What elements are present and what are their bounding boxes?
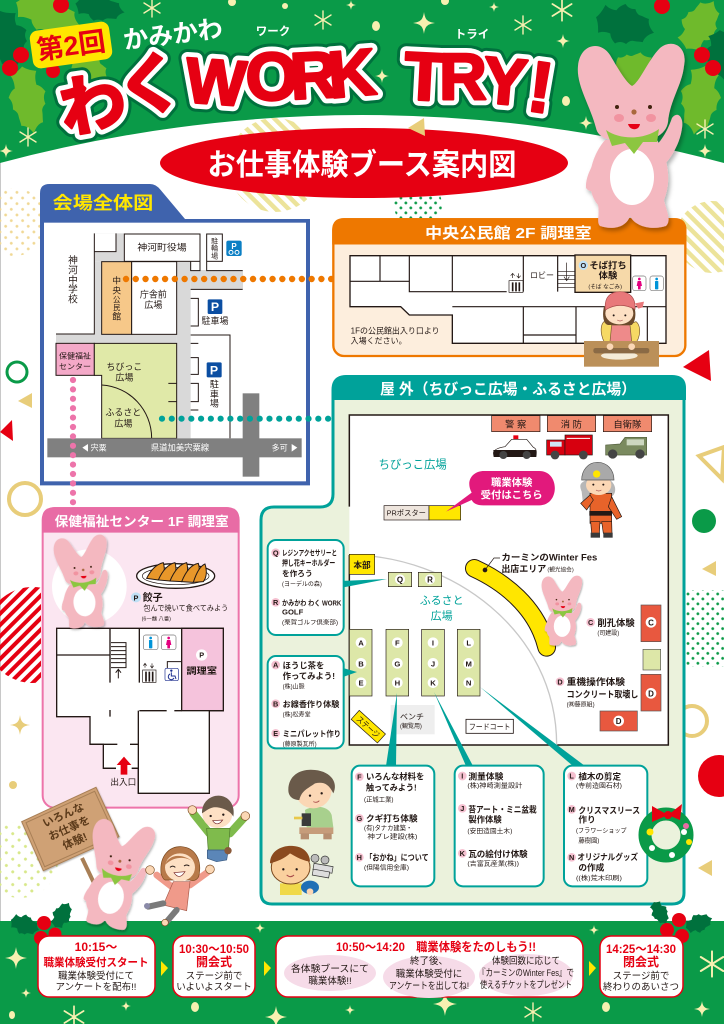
box: F G H: 触ってみよう! — [366, 781, 417, 792]
label: D heavy machinery: 重機操作体験 — [567, 676, 626, 687]
building labels: ちびっこ — [106, 362, 142, 372]
building labels: 広場 — [144, 299, 162, 310]
box: I J K: (吉富瓦産業(株)) — [467, 859, 519, 868]
agency signs — [492, 416, 652, 432]
box: I J K: I — [461, 772, 463, 781]
icon: parking 2 — [207, 362, 222, 377]
main title: waku WORK TRY: T — [402, 38, 448, 116]
building labels: 館 — [112, 310, 121, 321]
box: Q and R — [268, 540, 344, 635]
timeline: opening ceremony — [173, 936, 255, 997]
building labels: ふるさと — [105, 408, 141, 418]
dotted connector: teal — [162, 416, 333, 422]
timeline: reception start: 10:15〜 — [75, 940, 117, 954]
panel: venue overview map — [40, 184, 310, 485]
holly leaves: right — [591, 0, 724, 138]
booths C D: D — [616, 717, 622, 726]
icon: bicycle parking: P — [231, 242, 237, 251]
callout: reception here: 受付はこちら — [481, 489, 543, 502]
booths A to N: J — [431, 659, 435, 668]
illustration: woman rolling soba — [584, 292, 659, 367]
icon: accessible restroom — [165, 662, 182, 681]
side boxes: Q R and A B E — [268, 540, 344, 748]
signboard stick — [82, 858, 103, 902]
booths Q R — [388, 572, 442, 587]
area label: furusato plaza: ふるさと — [420, 594, 464, 607]
box: Q and R: かみかわ わく WORK — [282, 598, 342, 607]
icon: entrance arrow — [117, 757, 131, 775]
box: L M N: ((株)荒木印刷) — [576, 873, 622, 882]
icon: elevator — [509, 273, 523, 292]
map frame and tab — [40, 184, 310, 485]
box: L M N: (フラワーショップ — [576, 827, 627, 835]
furigana: waaku: ワーク — [256, 25, 290, 38]
main title: waku WORK TRY: わ — [54, 63, 132, 147]
timeline: reception start — [38, 936, 155, 997]
decorative shapes — [0, 118, 724, 898]
tan triangle — [408, 118, 425, 136]
dotted connector: orange — [126, 276, 333, 282]
floor plan: P — [199, 651, 204, 660]
box: I J K: J — [460, 804, 464, 813]
floor plan: 調理室 — [186, 665, 217, 676]
icon: parking 1: P — [211, 300, 219, 314]
mascot rabbit: header — [578, 44, 685, 228]
signboard: 体験! — [60, 829, 89, 853]
booth: soba making: 体験 — [599, 270, 618, 281]
box: F G H: F — [357, 772, 362, 781]
box: L M N: M — [569, 805, 575, 814]
booth P label: 包んで焼いて食べてみよう — [143, 603, 228, 612]
box: F G H: (正城工業) — [364, 794, 394, 803]
road network — [56, 233, 243, 438]
footer band — [0, 921, 724, 1024]
box: L M N: オリジナルグッズ — [577, 851, 638, 862]
oval: at each booth — [284, 955, 376, 991]
main title: waku WORK TRY: W — [183, 44, 249, 120]
holly leaves: left — [0, 0, 127, 137]
building labels: 輪 — [211, 244, 218, 253]
area label: chibikko plaza: ちびっこ広場 — [378, 457, 447, 471]
dotted connector: pink — [70, 380, 76, 510]
agency signs: 警 察 — [505, 418, 526, 429]
entry note — [351, 325, 440, 346]
booths A to N: H — [395, 679, 401, 688]
icon: restrooms — [143, 635, 176, 650]
icon: parking 1 — [208, 299, 222, 314]
illustration: jumping boy — [188, 796, 250, 862]
building labels: 公 — [113, 295, 121, 304]
prefectural road: 宍粟 — [91, 444, 107, 453]
winter fes area: 出店エリア — [501, 563, 546, 574]
outdoor site map — [349, 415, 668, 745]
timeline: opening ceremony: いよいよスタート — [176, 982, 252, 993]
main title: waku WORK TRY: O — [246, 39, 298, 115]
illustration: boy with hammer — [288, 770, 335, 839]
prefectural road: 県道加美宍粟線 — [151, 443, 210, 453]
main title: waku WORK TRY: ! — [523, 47, 558, 129]
panel heading: 中央公民館 2F 調理室 — [425, 225, 592, 242]
icon: bicycle parking — [226, 241, 242, 256]
timeline: closing ceremony: ステージ前で — [613, 970, 669, 982]
booths A to N: F — [395, 639, 400, 648]
building labels: 中 — [112, 274, 121, 285]
box: I J K — [455, 766, 544, 886]
box: F G H: いろんな材料を — [366, 771, 424, 782]
illustration: jumping girl — [144, 847, 214, 926]
timeline: opening ceremony: ステージ前で — [186, 970, 242, 982]
box: A B E: ミニパレット作り — [283, 729, 341, 739]
main title: waku WORK TRY — [54, 34, 558, 147]
entry note: 1Fの公民館出入り口より — [351, 325, 440, 335]
box: Q and R: レジンアクセサリーと — [282, 548, 337, 558]
box: Q and R: Q — [273, 548, 279, 557]
floor plan — [350, 256, 666, 343]
booths C D — [600, 605, 661, 731]
box: A B E: E — [273, 729, 278, 738]
bottom boxes: F to N — [270, 766, 647, 895]
illustration: christmas wreath — [645, 804, 692, 858]
callout pointers — [340, 579, 585, 766]
signboard: いろんな — [41, 800, 86, 830]
timeline: opening ceremony: 10:30〜10:50 — [179, 942, 249, 956]
box: Q and R: GOLF — [282, 608, 304, 617]
box: F G H — [352, 766, 434, 886]
box: F G H: (有)タナカ建築・ — [364, 823, 412, 832]
box: L M N: N — [569, 853, 574, 862]
box: F G H: 神プレ建設(株) — [367, 832, 417, 841]
label: D heavy machinery — [556, 676, 638, 709]
building labels: 駐 — [210, 378, 219, 389]
timeline: closing ceremony: 終わりのあいさつ — [603, 981, 679, 993]
building labels: 駐車場 — [202, 315, 228, 326]
building labels: 学 — [68, 284, 78, 296]
PR poster stand: PRポスター — [387, 509, 426, 518]
booth: soba making: (そば なごみ) — [588, 283, 622, 291]
oval: ticket gift — [478, 954, 574, 996]
timeline: reception start: アンケートを配布!! — [56, 981, 136, 993]
box: F G H: 「おかね」について — [365, 852, 429, 862]
icon: defence force jeep — [606, 437, 647, 459]
building labels: 車 — [210, 388, 219, 399]
panel: health and welfare center 1F — [42, 507, 239, 808]
box: Q and R: R — [273, 598, 279, 607]
sparkles — [0, 0, 713, 158]
panel heading: 屋 外（ちびっこ広場・ふるさと広場） — [380, 380, 636, 398]
area label: furusato plaza: 広場 — [431, 609, 453, 622]
building labels: 庁舎前 — [140, 288, 167, 299]
booth P label — [131, 591, 228, 623]
stage: ステージ — [354, 714, 382, 740]
building labels: 河 — [68, 264, 78, 276]
box: A B E: 作ってみよう! — [283, 671, 335, 681]
booth: soba making: O — [580, 261, 586, 270]
box: A B E: (株)松寿堂 — [283, 710, 311, 718]
booths A to N: L — [466, 639, 471, 648]
booths A to N: K — [430, 679, 436, 688]
box: A B E — [268, 656, 344, 748]
panel: outdoor area — [261, 375, 686, 904]
box: Q and R: (ヨーデルの森) — [282, 580, 322, 588]
timeline: opening ceremony: 開会式 — [196, 954, 232, 969]
box: A B E: (藤原製瓦所) — [283, 740, 317, 748]
box: L M N: 植木の剪定 — [578, 770, 621, 781]
building labels — [59, 236, 228, 428]
booths C D: D — [648, 689, 654, 698]
footer sparkles and holly — [5, 898, 723, 1024]
label: C drilling: (司建設) — [597, 629, 619, 637]
timeline: enjoy job experience — [276, 936, 583, 998]
label: C drilling: 削孔体験 — [597, 617, 635, 628]
furigana: torai: トライ — [455, 28, 489, 41]
box: Q and R: 押し花キーホルダー — [282, 558, 335, 568]
floor plan — [57, 628, 223, 793]
box: L M N — [564, 766, 647, 886]
box: F G H: G — [356, 814, 362, 823]
box: I J K: 製作体験 — [468, 814, 502, 825]
box: A B E: ほうじ茶を — [283, 660, 324, 670]
benches: (観覧用) — [400, 722, 422, 730]
benches: ベンチ — [400, 712, 424, 721]
mascot rabbit: health center — [53, 534, 112, 630]
booth P label: P — [134, 593, 139, 602]
entrance label: 出入口 — [110, 776, 136, 787]
agency signs: 自衛隊 — [613, 418, 642, 429]
rabbit backdrop circle — [52, 549, 127, 624]
box: A B E: お線香作り体験 — [283, 699, 339, 709]
icon: parking 2: P — [210, 363, 218, 377]
entry note: 入場ください。 — [351, 336, 407, 346]
building labels: 広場 — [114, 417, 132, 428]
booth P label: 餃子 — [143, 591, 163, 604]
subtitle ellipse: お仕事体験ブース案内図 — [208, 148, 516, 182]
booths A to N — [349, 629, 480, 696]
timeline: closing ceremony — [600, 936, 683, 997]
box: L M N: L — [569, 772, 574, 781]
text: kamikawa: かみかわ — [122, 15, 224, 55]
booths A to N: G — [394, 659, 400, 668]
booths A to N: E — [358, 679, 364, 688]
building labels: 神河町役場 — [137, 242, 187, 253]
oval: after finishing: 終了後、 — [410, 955, 448, 967]
box: I J K: 瓦の絵付け体験 — [468, 848, 528, 859]
food court: フードコート — [469, 723, 510, 732]
oval: at each booth: 職業体験!! — [308, 975, 352, 987]
box: A B E: A — [273, 661, 279, 670]
timeline: closing ceremony: 閉会式 — [623, 954, 659, 969]
icon: police car — [493, 435, 536, 459]
timeline: closing ceremony: 14:25〜14:30 — [606, 942, 676, 956]
buildings — [56, 233, 243, 438]
building labels: 広場 — [115, 372, 133, 383]
booths Q R: R — [427, 575, 433, 584]
box: I J K: 苔アート・ミニ盆栽 — [468, 803, 537, 814]
signboard: お仕事を — [46, 813, 92, 843]
main title: waku WORK TRY: K — [325, 34, 379, 112]
oval: after finishing — [383, 955, 475, 998]
booth P label: (6一麺 八番) — [142, 615, 171, 623]
mascot rabbit: outdoor — [542, 576, 582, 646]
box: I J K: (安田造園土木) — [467, 826, 512, 835]
winter fes area: カーミンのWinter Fes — [501, 552, 597, 562]
callout: reception here — [446, 471, 555, 512]
booths A to N: B — [358, 659, 364, 668]
building labels: センター — [59, 362, 91, 371]
timeline arrows — [161, 961, 596, 976]
header band — [0, 0, 724, 163]
box: L M N: クリスマスリース — [578, 805, 640, 815]
oval: ticket gift: 使えるチケットをプレゼント — [480, 979, 572, 991]
badge: dai 2 kai — [29, 21, 113, 69]
booth: soba making: そば打ち — [589, 260, 627, 271]
main title: waku WORK TRY: Y — [480, 42, 530, 120]
illustration: boy with money — [270, 846, 333, 895]
box: L M N: (寺前造園石材) — [576, 781, 622, 790]
winter fes area: (観光協会) — [547, 565, 574, 573]
box: F G H: H — [357, 853, 362, 862]
box: L M N: 作り — [578, 814, 596, 825]
oval: after finishing: アンケートを出してね! — [389, 980, 469, 992]
booths A to N: I — [432, 639, 434, 648]
PR poster stand — [384, 506, 461, 520]
oval: after finishing: 職業体験受付に — [396, 968, 462, 980]
box: I J K: K — [460, 849, 466, 858]
building labels: 民 — [113, 303, 121, 312]
label: D heavy machinery: コンクリート取壊し — [567, 688, 638, 699]
box: Q and R: を作ろう — [282, 568, 313, 578]
booths A to N: N — [466, 679, 472, 688]
building labels: 保健福祉 — [59, 350, 91, 360]
subtitle ellipse — [160, 128, 568, 198]
building labels: 場 — [210, 398, 219, 409]
label: D heavy machinery: D — [557, 677, 563, 686]
title outline layers — [54, 34, 558, 147]
building labels: 校 — [68, 294, 78, 306]
box: I J K: 測量体験 — [468, 770, 504, 781]
building labels: 場 — [211, 252, 218, 261]
prefectural road — [47, 393, 302, 477]
box: A B E: (株)山脈 — [283, 682, 305, 690]
building labels: 神 — [68, 254, 78, 266]
agency signs: 消 防 — [561, 418, 582, 429]
building labels: 央 — [112, 284, 121, 295]
mascot rabbit: holding sign — [74, 816, 157, 933]
label: C drilling: C — [588, 618, 594, 627]
illustration: firefighter — [580, 462, 622, 538]
booths Q R: Q — [397, 575, 403, 584]
icon: fire engine — [547, 435, 592, 459]
benches — [391, 705, 435, 734]
oval: ticket gift: 体験回数に応じて — [492, 955, 560, 967]
panel: central community hall 2F — [333, 219, 685, 367]
building labels: 中 — [68, 274, 78, 286]
signboard — [22, 787, 119, 871]
booths C D: C — [648, 618, 654, 627]
booth: soba making — [575, 255, 631, 292]
label: C drilling — [586, 617, 635, 637]
box: L M N: の作成 — [578, 862, 605, 873]
illustration: gyoza plate — [137, 563, 215, 588]
timeline: enjoy job experience: 10:50〜14:20 職業体験をたのしもう!! — [336, 939, 536, 954]
booths A to N: M — [465, 659, 472, 668]
box: Q and R: (栗賀ゴルフ倶楽部) — [282, 619, 338, 627]
main title: waku WORK TRY: R — [439, 39, 487, 113]
icon: elevator — [143, 663, 156, 682]
oval: ticket gift: 『カーミンのWinter Fes』で — [478, 968, 574, 979]
main title: waku WORK TRY: く — [112, 44, 188, 126]
building labels: 駐 — [211, 236, 218, 245]
tab heading: 会場全体図 — [53, 193, 153, 213]
HQ tent — [349, 554, 375, 574]
timeline: reception start: 職業体験受付スタート — [44, 955, 148, 969]
timeline: reception start: 職業体験受付にて — [58, 970, 134, 982]
winter fes area — [474, 552, 597, 647]
icon: restrooms — [633, 276, 663, 291]
food court — [466, 719, 513, 733]
badge: dai 2 kai: 第2回 — [35, 26, 107, 66]
area label: furusato plaza — [420, 594, 464, 622]
prefectural road: 多可 — [272, 443, 288, 453]
box: I J K: (株)神崎測量設計 — [467, 781, 523, 790]
floor plan: ロビー — [530, 271, 554, 280]
box: L M N: 藤樹園) — [578, 836, 599, 845]
booths A to N: A — [358, 639, 364, 648]
label: D heavy machinery: (㈱藤原組) — [567, 701, 595, 709]
box: F G H: (但陽信用金庫) — [364, 862, 409, 871]
main title: waku WORK TRY: R — [288, 37, 340, 113]
callout: reception here: 職業体験 — [491, 476, 533, 489]
panel heading: 保健福祉センター 1F 調理室 — [55, 513, 229, 529]
box: F G H: クギ打ち体験 — [366, 812, 418, 823]
HQ tent: 本部 — [353, 559, 371, 570]
oval: at each booth: 各体験ブースにて — [291, 963, 369, 975]
box: A B E: B — [273, 699, 278, 708]
